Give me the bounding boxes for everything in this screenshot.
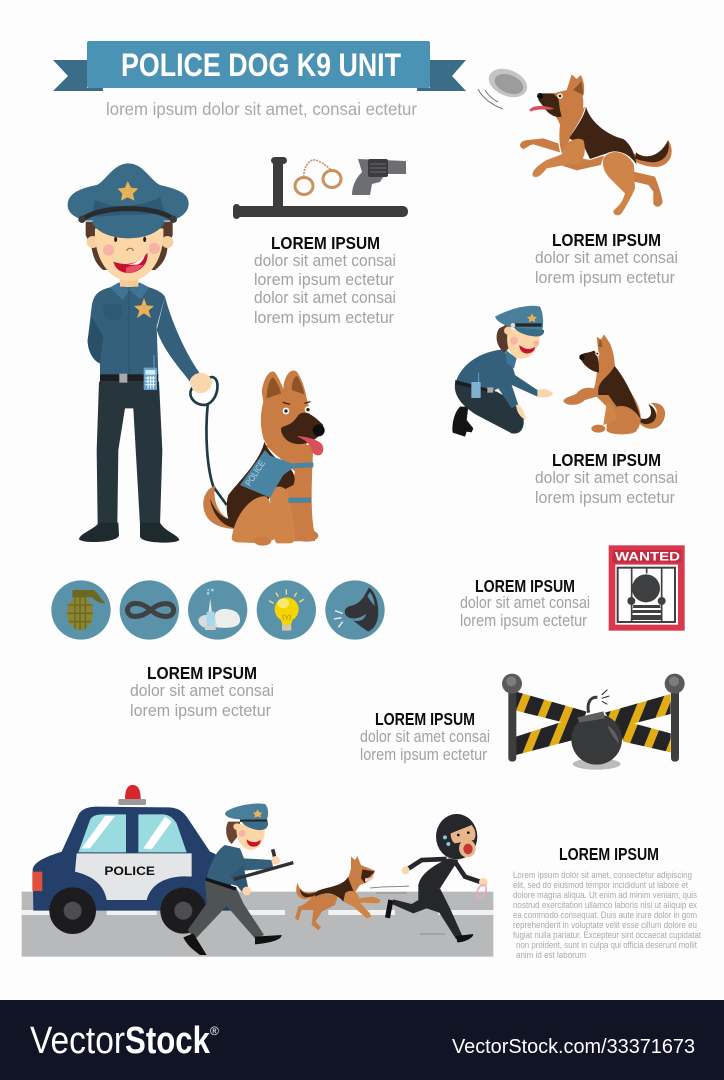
icon: barrier tape and bomb — [502, 674, 685, 770]
illustration: running dog — [295, 856, 381, 930]
text block: icon row: LOREM IPSUM — [147, 663, 257, 683]
dog body — [227, 442, 318, 546]
illustration: police car — [32, 785, 237, 934]
road — [22, 892, 493, 957]
text block: bomb — [360, 709, 490, 764]
icon: drugs and syringe — [188, 580, 247, 640]
text block: tools: dolor sit amet consai — [254, 252, 396, 270]
chase paragraph: reprehenderit in voluptate velit esse cillum dolore eu — [513, 920, 697, 930]
dog vest — [240, 450, 313, 503]
text block: wanted: dolor sit amet consai — [460, 594, 590, 612]
icon: light bulb — [257, 580, 316, 640]
officer head — [86, 222, 173, 287]
officer hat — [68, 163, 189, 238]
illustration: jumping dog — [520, 74, 672, 215]
chase paragraph: elit, sed do eiusmod tempor incididunt ut labore et — [513, 880, 688, 890]
chase paragraph: nostrud exercitation ullamco laboris nisi ut aliquip ex — [513, 900, 698, 910]
icon: police tools — [233, 157, 408, 219]
text block: wanted — [460, 576, 590, 630]
dog head — [261, 370, 325, 461]
illustration: kneeling officer and dog — [452, 306, 665, 437]
car tail light — [32, 872, 42, 891]
footer logo: VectorStock — [30, 1020, 228, 1062]
footer bar — [0, 1000, 724, 1080]
illustration: sitting police dog — [203, 370, 325, 546]
leash and hand — [190, 373, 227, 505]
officer legs and shoes — [79, 382, 179, 543]
text block: kneeling officer: dolor sit amet consai — [535, 469, 678, 487]
text block: jumping dog: dolor sit amet consai — [535, 249, 678, 267]
car siren — [118, 785, 146, 805]
kneeling officer — [452, 306, 553, 437]
text block: tools: lorem ipsum ectetur — [254, 309, 394, 327]
icon: wanted poster — [609, 545, 685, 631]
icon row — [51, 580, 385, 640]
subtitle: lorem ipsum dolor sit amet, consai ectetur — [106, 99, 417, 119]
footer logo: ® — [210, 1024, 219, 1038]
text block: icon row — [130, 663, 274, 720]
text block: kneeling officer: LOREM IPSUM — [552, 450, 661, 470]
chase paragraph: Lorem ipsum dolor sit amet, consectetur adipiscing — [513, 870, 692, 880]
chase paragraph: dolore magna aliqua. Ut enim ad minim veniam, quis — [513, 890, 698, 900]
illustration: running officer — [183, 804, 293, 955]
car body — [33, 807, 237, 911]
text block: bomb: dolor sit amet consai — [360, 728, 490, 746]
icon: baton — [233, 157, 408, 219]
illustration: running thief — [385, 814, 488, 942]
title banner — [53, 41, 466, 91]
text block: tools: LOREM IPSUM — [271, 233, 380, 253]
text block: wanted: lorem ipsum ectetur — [460, 612, 587, 630]
bomb shadow — [573, 758, 621, 770]
icon: frisbee — [478, 63, 531, 109]
car wheels — [49, 887, 206, 934]
officer belt and radio — [100, 355, 158, 390]
text block: wanted: LOREM IPSUM — [475, 576, 575, 596]
officer torso — [88, 282, 199, 382]
icon: handcuffs — [295, 160, 341, 194]
title banner: POLICE DOG K9 UNIT — [121, 47, 401, 83]
text block: icon row: lorem ipsum ectetur — [130, 702, 271, 720]
chase heading: LOREM IPSUM — [559, 844, 659, 864]
chase paragraph — [513, 870, 701, 960]
chase paragraph: anim id est laborum — [516, 950, 586, 960]
bomb — [571, 690, 622, 765]
dog tail — [203, 486, 237, 529]
car police label: POLICE — [104, 864, 155, 878]
text block: bomb: lorem ipsum ectetur — [360, 746, 487, 764]
motion lines — [370, 886, 445, 934]
text block: tools: lorem ipsum ectetur — [254, 271, 394, 289]
text block: tools: dolor sit amet consai — [254, 289, 396, 307]
text block: jumping dog — [535, 230, 678, 287]
chase paragraph: fugiat nulla pariatur. Excepteur sint occaecat cupidatat — [513, 930, 701, 940]
chase paragraph: ea commodo consequat. Duis aute irure dolor in gom — [513, 910, 697, 920]
barrier posts — [502, 674, 685, 762]
icon: wanted poster: WANTED — [615, 550, 680, 564]
car door panel — [75, 853, 192, 900]
icon: mask — [120, 580, 179, 640]
icon: revolver — [352, 159, 406, 195]
sitting dog side view — [563, 334, 665, 434]
text block: kneeling officer — [535, 450, 678, 507]
icon: barking dog — [325, 580, 385, 640]
text block: jumping dog: LOREM IPSUM — [552, 230, 661, 250]
text block: tools — [254, 233, 396, 327]
icon: grenade — [51, 580, 111, 640]
text block: jumping dog: lorem ipsum ectetur — [535, 269, 675, 287]
chase paragraph: non proident, sunt in culpa qui officia deserunt mollit — [516, 940, 697, 950]
text block: kneeling officer: lorem ipsum ectetur — [535, 489, 675, 507]
text block: icon row: dolor sit amet consai — [130, 682, 274, 700]
text block: bomb: LOREM IPSUM — [375, 709, 475, 729]
dog vest: POLICE — [243, 459, 267, 488]
illustration: standing officer — [68, 163, 227, 543]
text block: chase — [513, 844, 701, 960]
footer image id: VectorStock.com/33371673 — [452, 1036, 695, 1058]
car windows — [78, 814, 187, 852]
barrier tapes — [516, 692, 671, 755]
